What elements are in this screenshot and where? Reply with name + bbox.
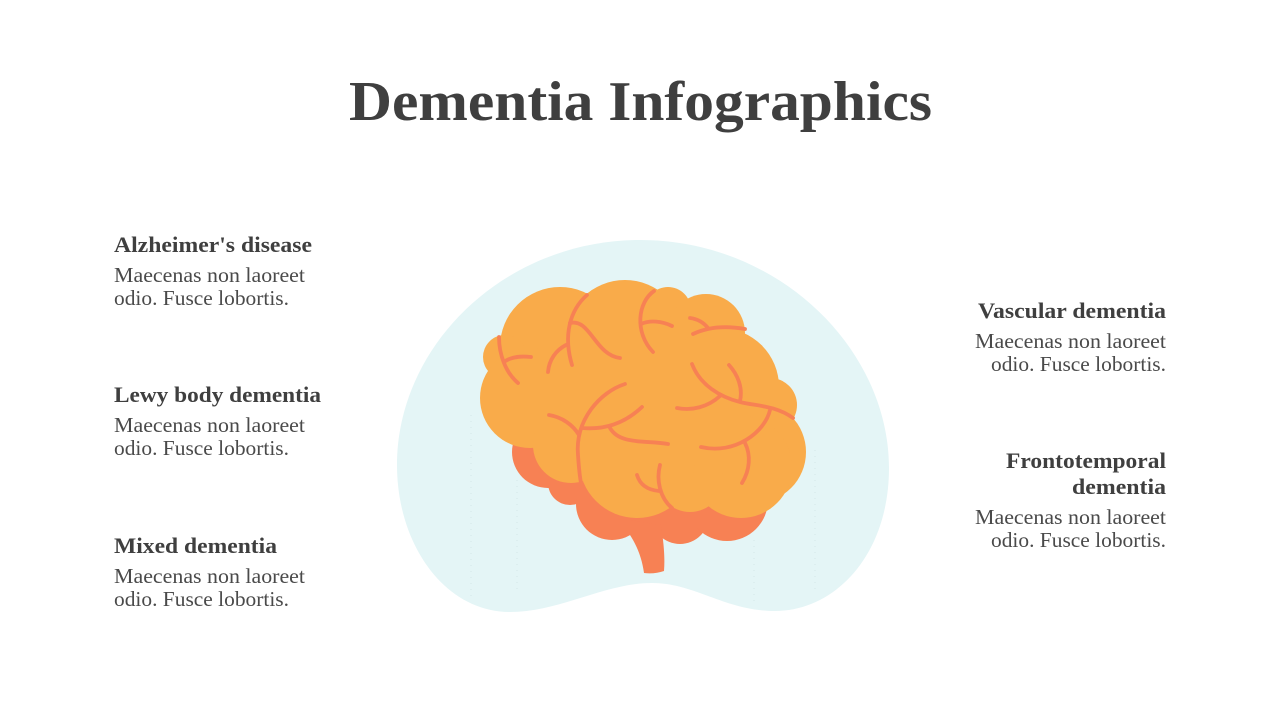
brain veins bbox=[499, 291, 793, 508]
text block: Vascular dementia: odio. Fusce lobortis. bbox=[991, 352, 1166, 376]
text block: Frontotemporal dementia: odio. Fusce lobortis. bbox=[991, 528, 1166, 552]
text block: Mixed dementia: Maecenas non laoreet bbox=[114, 564, 305, 588]
text block: Lewy body dementia bbox=[114, 382, 321, 460]
text block: Mixed dementia: Mixed dementia bbox=[114, 533, 277, 558]
brain stem and lower lobes bbox=[512, 416, 768, 573]
text block: Alzheimer's disease bbox=[114, 232, 312, 310]
background blob bbox=[397, 240, 889, 612]
text block: Alzheimer's disease: Maecenas non laoreet bbox=[114, 263, 305, 287]
icon: brain bbox=[480, 280, 806, 573]
text block: Mixed dementia: odio. Fusce lobortis. bbox=[114, 587, 289, 611]
text block: Frontotemporal dementia bbox=[975, 448, 1166, 552]
text block: Lewy body dementia: Lewy body dementia bbox=[114, 382, 321, 407]
text block: Alzheimer's disease: Alzheimer's disease bbox=[114, 232, 312, 257]
text block: Vascular dementia bbox=[975, 298, 1166, 376]
text block: Vascular dementia: Vascular dementia bbox=[978, 298, 1166, 323]
text block: Frontotemporal dementia: Frontotemporal bbox=[1006, 448, 1166, 473]
text block: Frontotemporal dementia: dementia bbox=[1072, 474, 1166, 499]
text block: Lewy body dementia: Maecenas non laoreet bbox=[114, 413, 305, 437]
text block: Frontotemporal dementia: Maecenas non laoreet bbox=[975, 505, 1166, 529]
text block: Alzheimer's disease: odio. Fusce lobortis. bbox=[114, 286, 289, 310]
upper brain lobes bbox=[480, 280, 806, 518]
title: Dementia Infographics bbox=[349, 71, 932, 133]
text block: Mixed dementia bbox=[114, 533, 305, 611]
text block: Lewy body dementia: odio. Fusce lobortis. bbox=[114, 436, 289, 460]
text block: Vascular dementia: Maecenas non laoreet bbox=[975, 329, 1166, 353]
